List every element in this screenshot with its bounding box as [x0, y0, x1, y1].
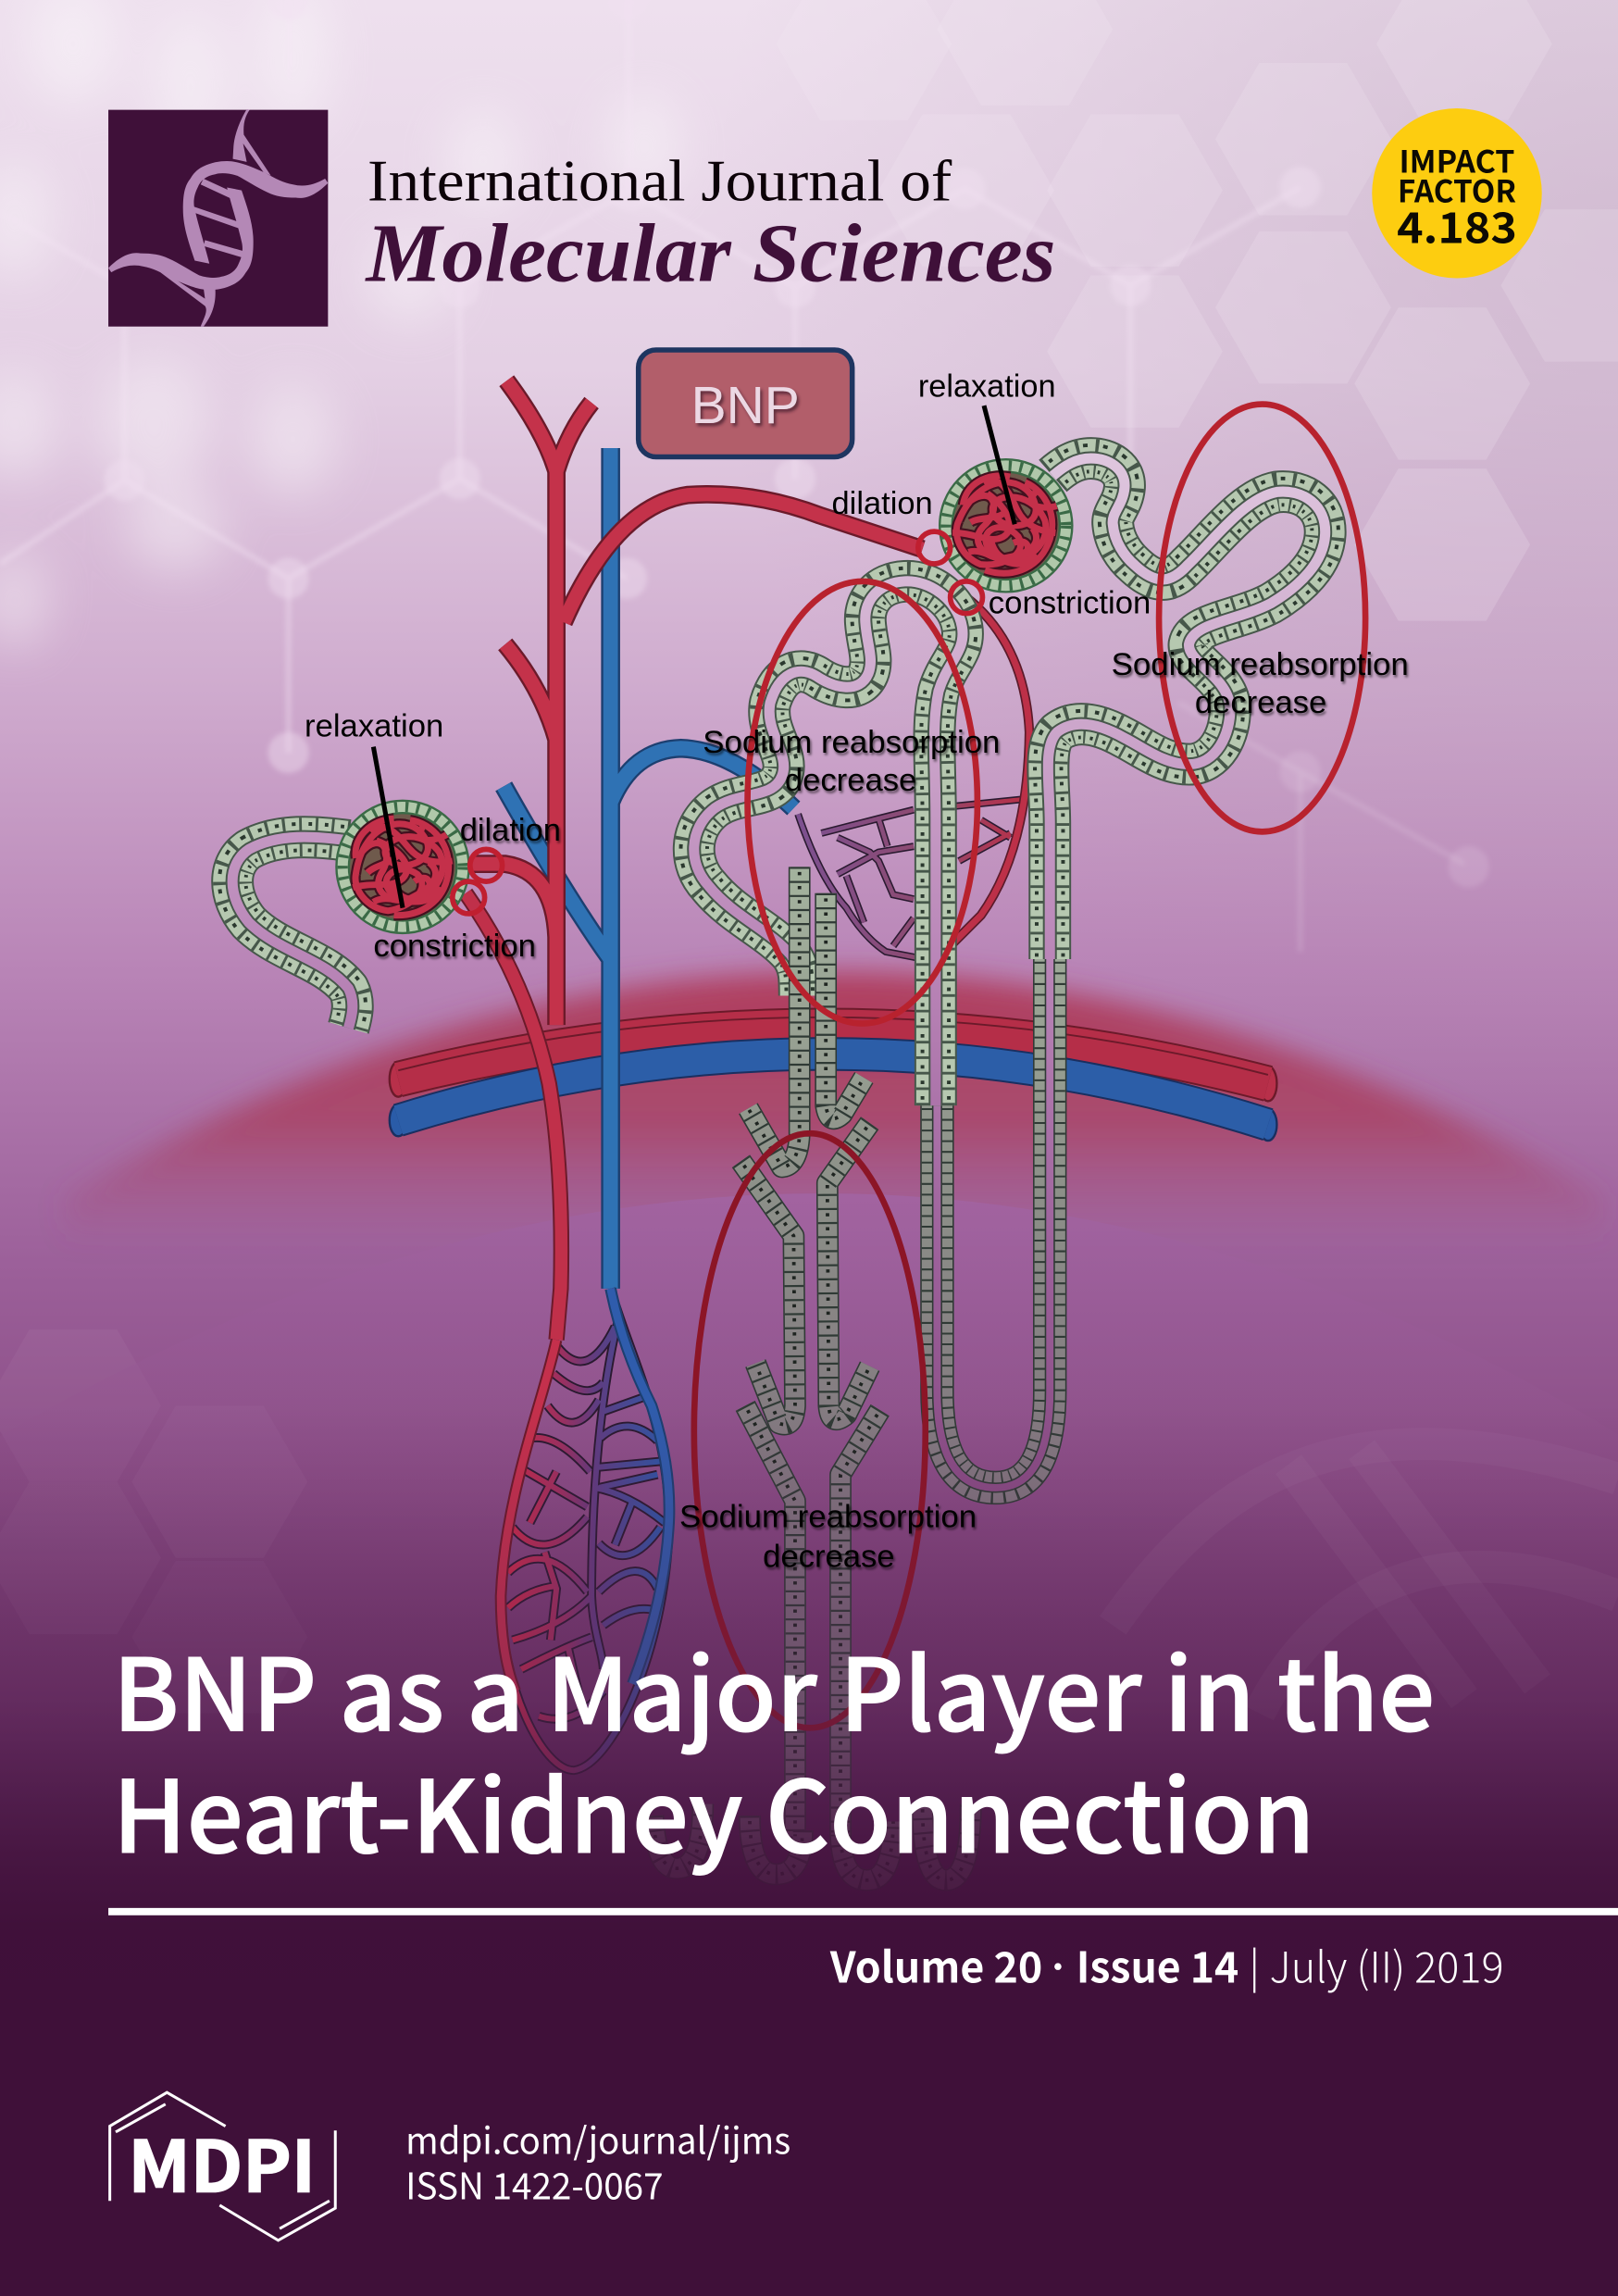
long loop of Henle — [937, 937, 1050, 1488]
marker circle: dilation right — [918, 531, 951, 564]
label: sodium reabsorption middle — [703, 725, 1000, 798]
ISSN: ISSN 1422-0067 — [405, 2158, 664, 2211]
kidney cortex arc — [66, 972, 1603, 1259]
blue vein tree — [504, 448, 793, 1289]
efferent vessel to lower capillary net, left — [466, 893, 561, 1340]
label: sodium reabsorption middle: decrease — [785, 763, 916, 798]
issue line: July (II) 2019 — [1270, 1935, 1504, 1996]
highlight ellipse: middle tubule — [748, 581, 977, 1024]
horizontal arcuate vein — [390, 1054, 1276, 1141]
label: sodium reabsorption bottom: Sodium reabsorption — [679, 1500, 977, 1535]
label: sodium reabsorption middle: Sodium reabsorption — [703, 725, 1000, 760]
right side shade — [0, 0, 1618, 1171]
label: sodium reabsorption bottom — [679, 1500, 977, 1574]
BNP badge: BNP — [691, 376, 800, 435]
marker circle: constriction left — [453, 881, 485, 914]
impact factor badge: IMPACT — [1400, 137, 1514, 182]
upper capillary network — [798, 597, 1029, 957]
label: sodium reabsorption right: decrease — [1195, 685, 1326, 720]
label: dilation left: dilation — [460, 813, 561, 848]
issue line — [829, 1935, 1504, 1996]
impact factor badge: FACTOR — [1398, 166, 1516, 211]
issue line: Volume 20 — [829, 1935, 1042, 1996]
diagram labels — [305, 369, 1409, 1574]
label: sodium reabsorption right: Sodium reabsorption — [1112, 647, 1409, 682]
article title: BNP as a Major Player in the — [113, 1616, 1435, 1759]
marker circle: constriction right — [951, 581, 982, 614]
marker circle: dilation left — [470, 849, 503, 881]
MDPI logo: MDPI — [128, 2111, 316, 2213]
red artery tree — [471, 381, 923, 1025]
label: constriction right: constriction — [989, 586, 1151, 621]
glomerulus right — [945, 466, 1066, 586]
impact factor badge: 4.183 — [1397, 195, 1517, 256]
pointer line: relaxation right — [984, 406, 1014, 524]
label: dilation right: dilation — [832, 486, 933, 521]
kidney medulla arc — [0, 1193, 1618, 1640]
background pattern: molecule network — [0, 0, 1489, 952]
article title: Heart-Kidney Connection — [113, 1737, 1315, 1881]
journal URL: mdpi.com/journal/ijms — [405, 2113, 790, 2165]
background pattern: soft light blobs — [0, 0, 682, 647]
highlight ellipse: right tubule — [1159, 405, 1365, 831]
title rule — [108, 1908, 1618, 1915]
background pattern: faint DNA watermark — [1113, 1444, 1618, 1714]
horizontal arcuate artery — [390, 1017, 1276, 1101]
background pattern: hexagons — [0, 0, 1618, 1714]
bottom fade over the diagram — [0, 1405, 1618, 2021]
highlight ellipse: collecting duct — [694, 1133, 926, 1728]
nephron and vessels diagram — [232, 381, 1365, 1880]
journal logo — [108, 109, 328, 327]
collecting ducts — [653, 867, 971, 1880]
label: relaxation left: relaxation — [305, 709, 443, 744]
glomerulus left — [342, 806, 463, 927]
issue line: Issue 14 — [1077, 1935, 1238, 1996]
journal name line two: Molecular Sciences — [364, 207, 1056, 300]
lower capillary network — [501, 1289, 669, 1770]
convoluted tubules — [232, 458, 1326, 1105]
MDPI logo — [110, 2092, 335, 2240]
pointer line: relaxation left — [373, 747, 403, 908]
label: constriction left: constriction — [373, 929, 536, 964]
article title — [113, 1616, 1435, 1881]
label: sodium reabsorption bottom: decrease — [763, 1539, 895, 1574]
label: sodium reabsorption right — [1112, 647, 1409, 720]
label: relaxation right: relaxation — [918, 369, 1056, 405]
impact factor badge — [1372, 108, 1542, 279]
BNP badge — [639, 350, 853, 456]
journal name line one: International Journal of — [367, 149, 952, 214]
icon: DNA helix — [108, 109, 328, 327]
